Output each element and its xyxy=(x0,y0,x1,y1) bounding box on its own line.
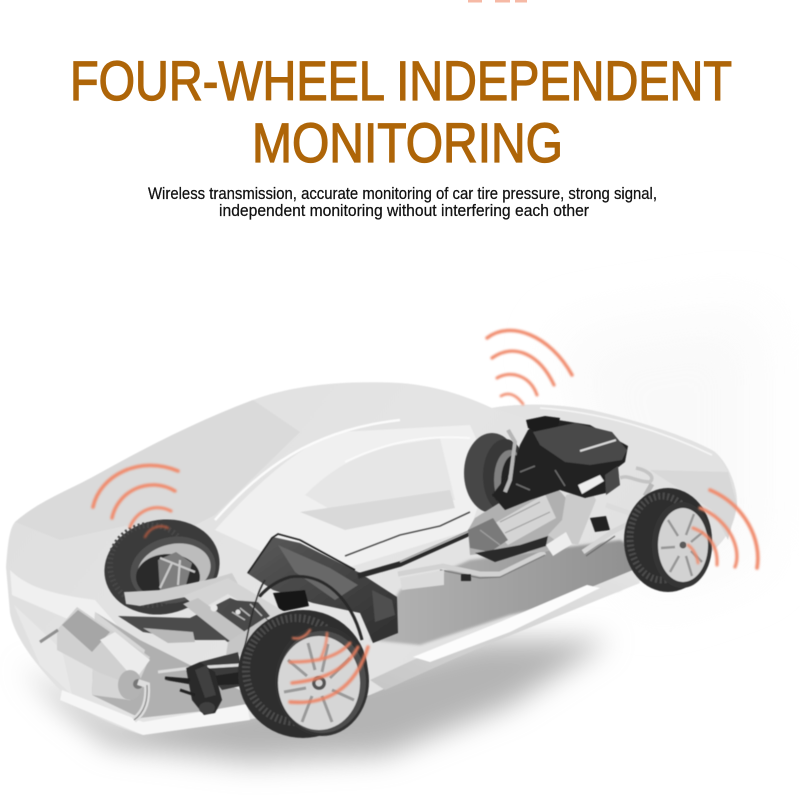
exhaust tail pipe xyxy=(134,682,147,720)
subtitle xyxy=(148,185,657,220)
muffler xyxy=(40,607,150,720)
roof highlight lines xyxy=(215,420,400,520)
subtitle: independent monitoring without interfering each other xyxy=(219,202,589,220)
alloy rim xyxy=(278,636,360,730)
title xyxy=(70,49,732,174)
car body xyxy=(6,382,737,735)
lower rear bumper lip xyxy=(60,690,250,735)
hood xyxy=(492,405,728,472)
rear bumper highlight xyxy=(10,570,130,640)
signal waves: far rear wheel xyxy=(93,465,178,537)
floor dark panel xyxy=(370,540,650,645)
side sill highlight xyxy=(413,585,600,662)
title: MONITORING xyxy=(252,111,563,174)
signal waves: near rear wheel xyxy=(290,630,368,702)
transmission xyxy=(468,482,596,562)
far front wheel xyxy=(464,433,527,513)
electric pump xyxy=(165,662,222,715)
backdrop haze behind car xyxy=(560,310,760,600)
near rear wheel xyxy=(238,610,369,738)
front suspension xyxy=(583,468,652,556)
catalytic converter xyxy=(548,488,596,545)
side windows xyxy=(305,438,455,515)
subtitle: Wireless transmission, accurate monitoring of car tire pressure, strong signal, xyxy=(148,185,657,203)
near front wheel xyxy=(624,488,712,592)
signal waves: front far wheel xyxy=(487,330,572,404)
rear subframe and suspension xyxy=(118,573,285,715)
lower sill xyxy=(370,570,640,690)
cropped signal fragment at top edge xyxy=(468,0,527,2)
ground shadow xyxy=(22,640,610,762)
side panel below windows xyxy=(215,425,490,570)
far rear wheel xyxy=(95,509,229,625)
car illustration xyxy=(6,382,737,762)
alloy rim xyxy=(658,508,708,582)
signal waves: near front wheel xyxy=(688,490,758,568)
rear deck xyxy=(15,400,300,540)
front wing xyxy=(650,470,737,540)
fuel tank xyxy=(236,534,398,650)
engine xyxy=(492,416,628,510)
rear floor panel xyxy=(92,612,250,718)
propeller shaft and long exhaust xyxy=(345,512,545,590)
